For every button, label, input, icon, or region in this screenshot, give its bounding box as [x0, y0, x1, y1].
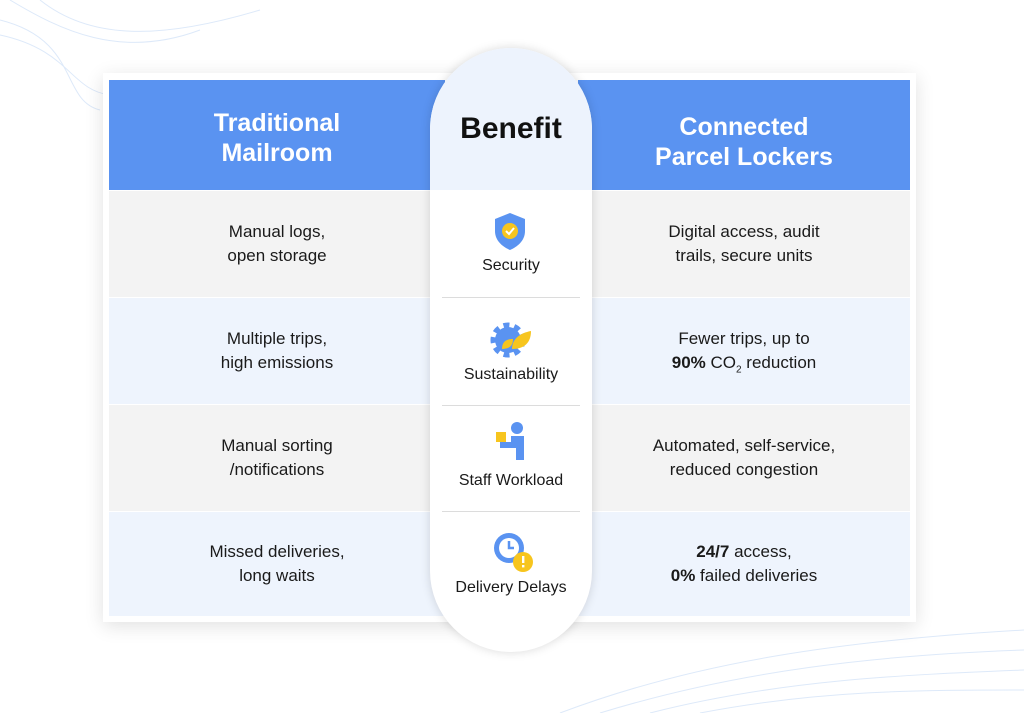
right column rows: Automated, self-service,: [653, 436, 835, 455]
right column rows: trails, secure units: [676, 246, 812, 265]
header: connected parcel lockers: Connected: [679, 113, 809, 141]
label: delivery delays: Delivery Delays: [455, 579, 567, 596]
right column rows: 24/7 access,: [696, 542, 792, 561]
left column rows: open storage: [227, 246, 327, 265]
left column rows: Multiple trips,: [227, 329, 327, 348]
header: traditional mailroom: Traditional: [214, 109, 340, 137]
card: [103, 73, 916, 622]
label: security: Security: [482, 257, 540, 274]
right column rows: 90% CO2 reduction: [672, 353, 816, 375]
left column rows: high emissions: [221, 353, 333, 372]
header: traditional mailroom: Mailroom: [221, 139, 333, 167]
header: traditional mailroom: [109, 80, 445, 190]
header: connected parcel lockers: Parcel Lockers: [655, 143, 833, 171]
benefit pill: [430, 48, 592, 652]
left column rows: long waits: [239, 566, 315, 585]
label: sustainability: Sustainability: [464, 366, 558, 383]
icon: shield: [495, 213, 525, 250]
header: connected parcel lockers: [578, 80, 910, 190]
right column rows: reduced congestion: [670, 460, 818, 479]
label: staff workload: Staff Workload: [459, 472, 563, 489]
right column rows: Fewer trips, up to: [678, 329, 810, 348]
icon: gear leaf: [490, 322, 531, 358]
right column rows: [578, 191, 910, 616]
left column rows: Manual sorting: [221, 436, 333, 455]
left column rows: Manual logs,: [229, 222, 325, 241]
icon: staff: [496, 422, 524, 460]
left column rows: [109, 191, 444, 616]
right column rows: 0% failed deliveries: [671, 566, 817, 585]
right column rows: Digital access, audit: [668, 222, 820, 241]
icon: clock alert: [494, 533, 533, 572]
left column rows: /notifications: [230, 460, 324, 479]
benefit heading: Benefit: [460, 112, 562, 145]
left column rows: Missed deliveries,: [209, 542, 345, 561]
